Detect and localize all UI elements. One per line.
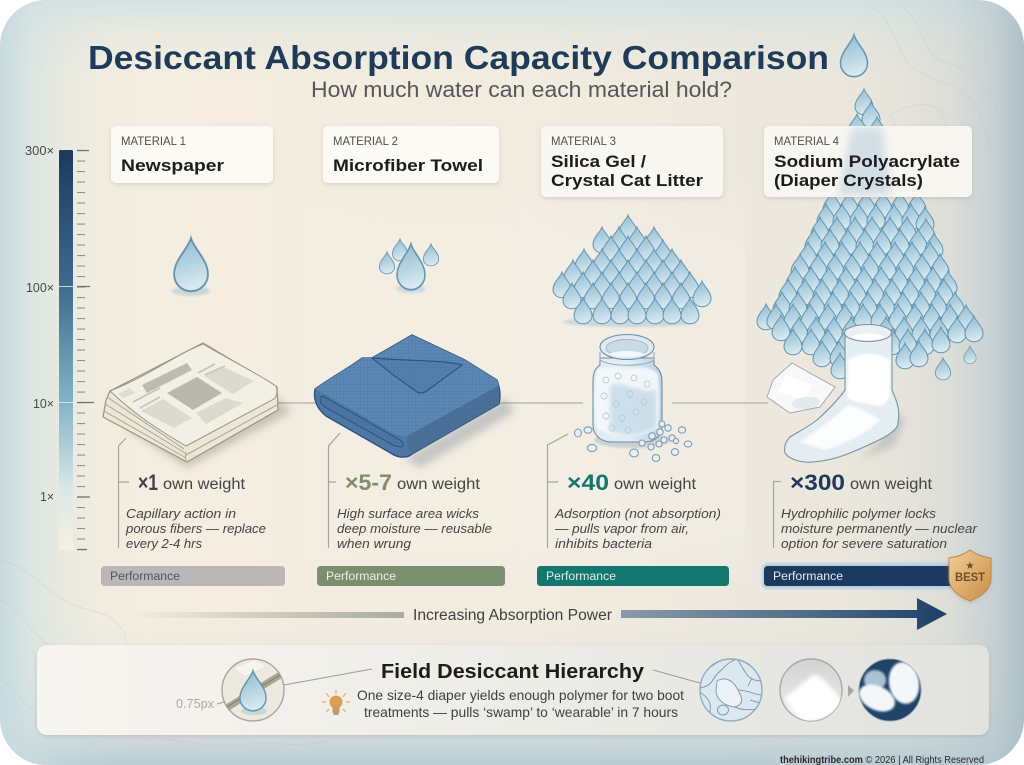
- card: material 4: Sodium Polyacrylate: [774, 152, 960, 171]
- card: material 1: [111, 126, 273, 183]
- description: silica: [554, 506, 721, 551]
- description: towel: [337, 506, 492, 551]
- panel: field desiccant hierarchy: [37, 645, 989, 735]
- illustration: folded microfiber towel: [314, 335, 515, 468]
- tip text: treatments — pulls ‘swamp’ to ‘wearable’ in 7 hours: [364, 704, 678, 720]
- detail circle: white powder: [780, 659, 842, 721]
- illustration: newspaper stack: [103, 343, 292, 468]
- arrow tail: increasing absorption: [130, 612, 404, 618]
- chart: logarithmic scale bar: 100×: [26, 281, 54, 295]
- subtitle: How much water can each material hold?: [311, 77, 732, 102]
- tip text: [357, 687, 684, 720]
- callout bracket: newspaper: [118, 438, 129, 548]
- icon: single drop: [172, 238, 210, 296]
- value: silica: [567, 470, 697, 495]
- connector to crystal circle: [653, 670, 700, 683]
- performance bar: polymer: Performance: [773, 571, 843, 583]
- description: polymer: option for severe saturation: [781, 536, 947, 551]
- card: material 3: MATERIAL 3: [551, 136, 616, 148]
- chart: logarithmic scale bar: 1×: [40, 490, 54, 504]
- illustration: diaper: [767, 363, 835, 413]
- detail circle: fiber with drop: [176, 659, 372, 721]
- chart: logarithmic scale bar: 10×: [33, 397, 54, 411]
- description: newspaper: Capillary action in: [126, 506, 236, 521]
- chart: logarithmic scale bar: 300×: [25, 144, 54, 158]
- illustration: scattered crystals: [575, 421, 692, 461]
- value: newspaper: [138, 470, 246, 495]
- value: silica: ×40: [567, 470, 609, 495]
- badge: best: ★: [965, 560, 975, 572]
- performance bar: newspaper: [101, 566, 285, 586]
- performance bar: towel: Performance: [326, 571, 396, 583]
- card: material 1: Newspaper: [121, 156, 224, 175]
- detail circle: crystal structure: [700, 659, 765, 721]
- value: towel: own weight: [397, 476, 481, 493]
- description: towel: when wrung: [337, 536, 412, 551]
- description: polymer: moisture permanently — nuclear: [781, 521, 978, 536]
- card: material 4: (Diaper Crystals): [774, 171, 923, 190]
- callout bracket: polymer: [774, 482, 781, 548]
- performance bar: silica: [537, 566, 729, 586]
- illustration: sock filled with crystals: [785, 324, 905, 462]
- value: towel: ×5-7: [345, 470, 392, 495]
- description: towel: deep moisture — reusable: [337, 521, 492, 536]
- detail circle: swollen gel: [855, 659, 922, 721]
- arrow: powder to gel: [848, 685, 854, 697]
- icon: drops pile material 3: [553, 215, 711, 327]
- chart: logarithmic scale bar: [25, 144, 94, 552]
- connector line at 10x: [278, 402, 768, 404]
- description: silica: Adsorption (not absorption): [554, 506, 721, 521]
- callout bracket: silica: [548, 434, 568, 548]
- card: material 4: MATERIAL 4: [774, 136, 840, 148]
- description: newspaper: [125, 506, 266, 551]
- arrow label: Increasing Absorption Power: [413, 607, 612, 624]
- performance bar: silica: Performance: [546, 571, 616, 583]
- value: towel: [345, 470, 481, 495]
- detail circle: fiber with drop: 0.75px: [176, 697, 215, 711]
- icon: title water drop: [840, 35, 868, 77]
- title: Desiccant Absorption Capacity Comparison: [88, 39, 829, 76]
- value: newspaper: own weight: [163, 476, 246, 493]
- description: newspaper: porous fibers — replace: [125, 521, 266, 536]
- description: newspaper: every 2-4 hrs: [126, 536, 202, 551]
- illustration: jar of silica crystals: [593, 334, 670, 448]
- icon: drops pile material 4: [757, 89, 983, 380]
- card: material 2: MATERIAL 2: [333, 136, 398, 148]
- card: material 4: [764, 126, 972, 197]
- description: polymer: Hydrophilic polymer locks: [781, 506, 936, 521]
- description: polymer: [781, 506, 978, 551]
- performance bar: towel: [317, 566, 505, 586]
- card: material 3: Crystal Cat Litter: [551, 171, 703, 190]
- value: polymer: own weight: [850, 476, 933, 493]
- card: material 2: [323, 126, 499, 183]
- performance bar: polymer: [762, 563, 958, 589]
- description: silica: — pulls vapor from air,: [554, 521, 689, 536]
- callout bracket: towel: [328, 433, 340, 548]
- performance bar: newspaper: Performance: [110, 571, 180, 583]
- icon: four drops: [379, 239, 439, 293]
- arrow: increasing absorption: [621, 598, 947, 630]
- card: material 3: Silica Gel /: [551, 152, 646, 171]
- value: polymer: [790, 470, 933, 495]
- column tints: [302, 170, 745, 590]
- description: towel: High surface area wicks: [337, 506, 479, 521]
- value: newspaper: ×1: [138, 470, 158, 495]
- icon: light bulb: [322, 690, 350, 715]
- tip text: One size-4 diaper yields enough polymer for two boot: [357, 687, 684, 703]
- badge: best: [949, 550, 991, 601]
- card: material 1: MATERIAL 1: [121, 136, 186, 148]
- value: polymer: ×300: [790, 470, 845, 495]
- description: silica: inhibits bacteria: [555, 536, 652, 551]
- badge: best: BEST: [955, 572, 985, 584]
- card: material 3: [541, 126, 723, 197]
- card: material 2: Microfiber Towel: [333, 156, 483, 175]
- value: silica: own weight: [614, 476, 697, 493]
- heading: field desiccant hierarchy: Field Desiccant Hierarchy: [381, 661, 645, 683]
